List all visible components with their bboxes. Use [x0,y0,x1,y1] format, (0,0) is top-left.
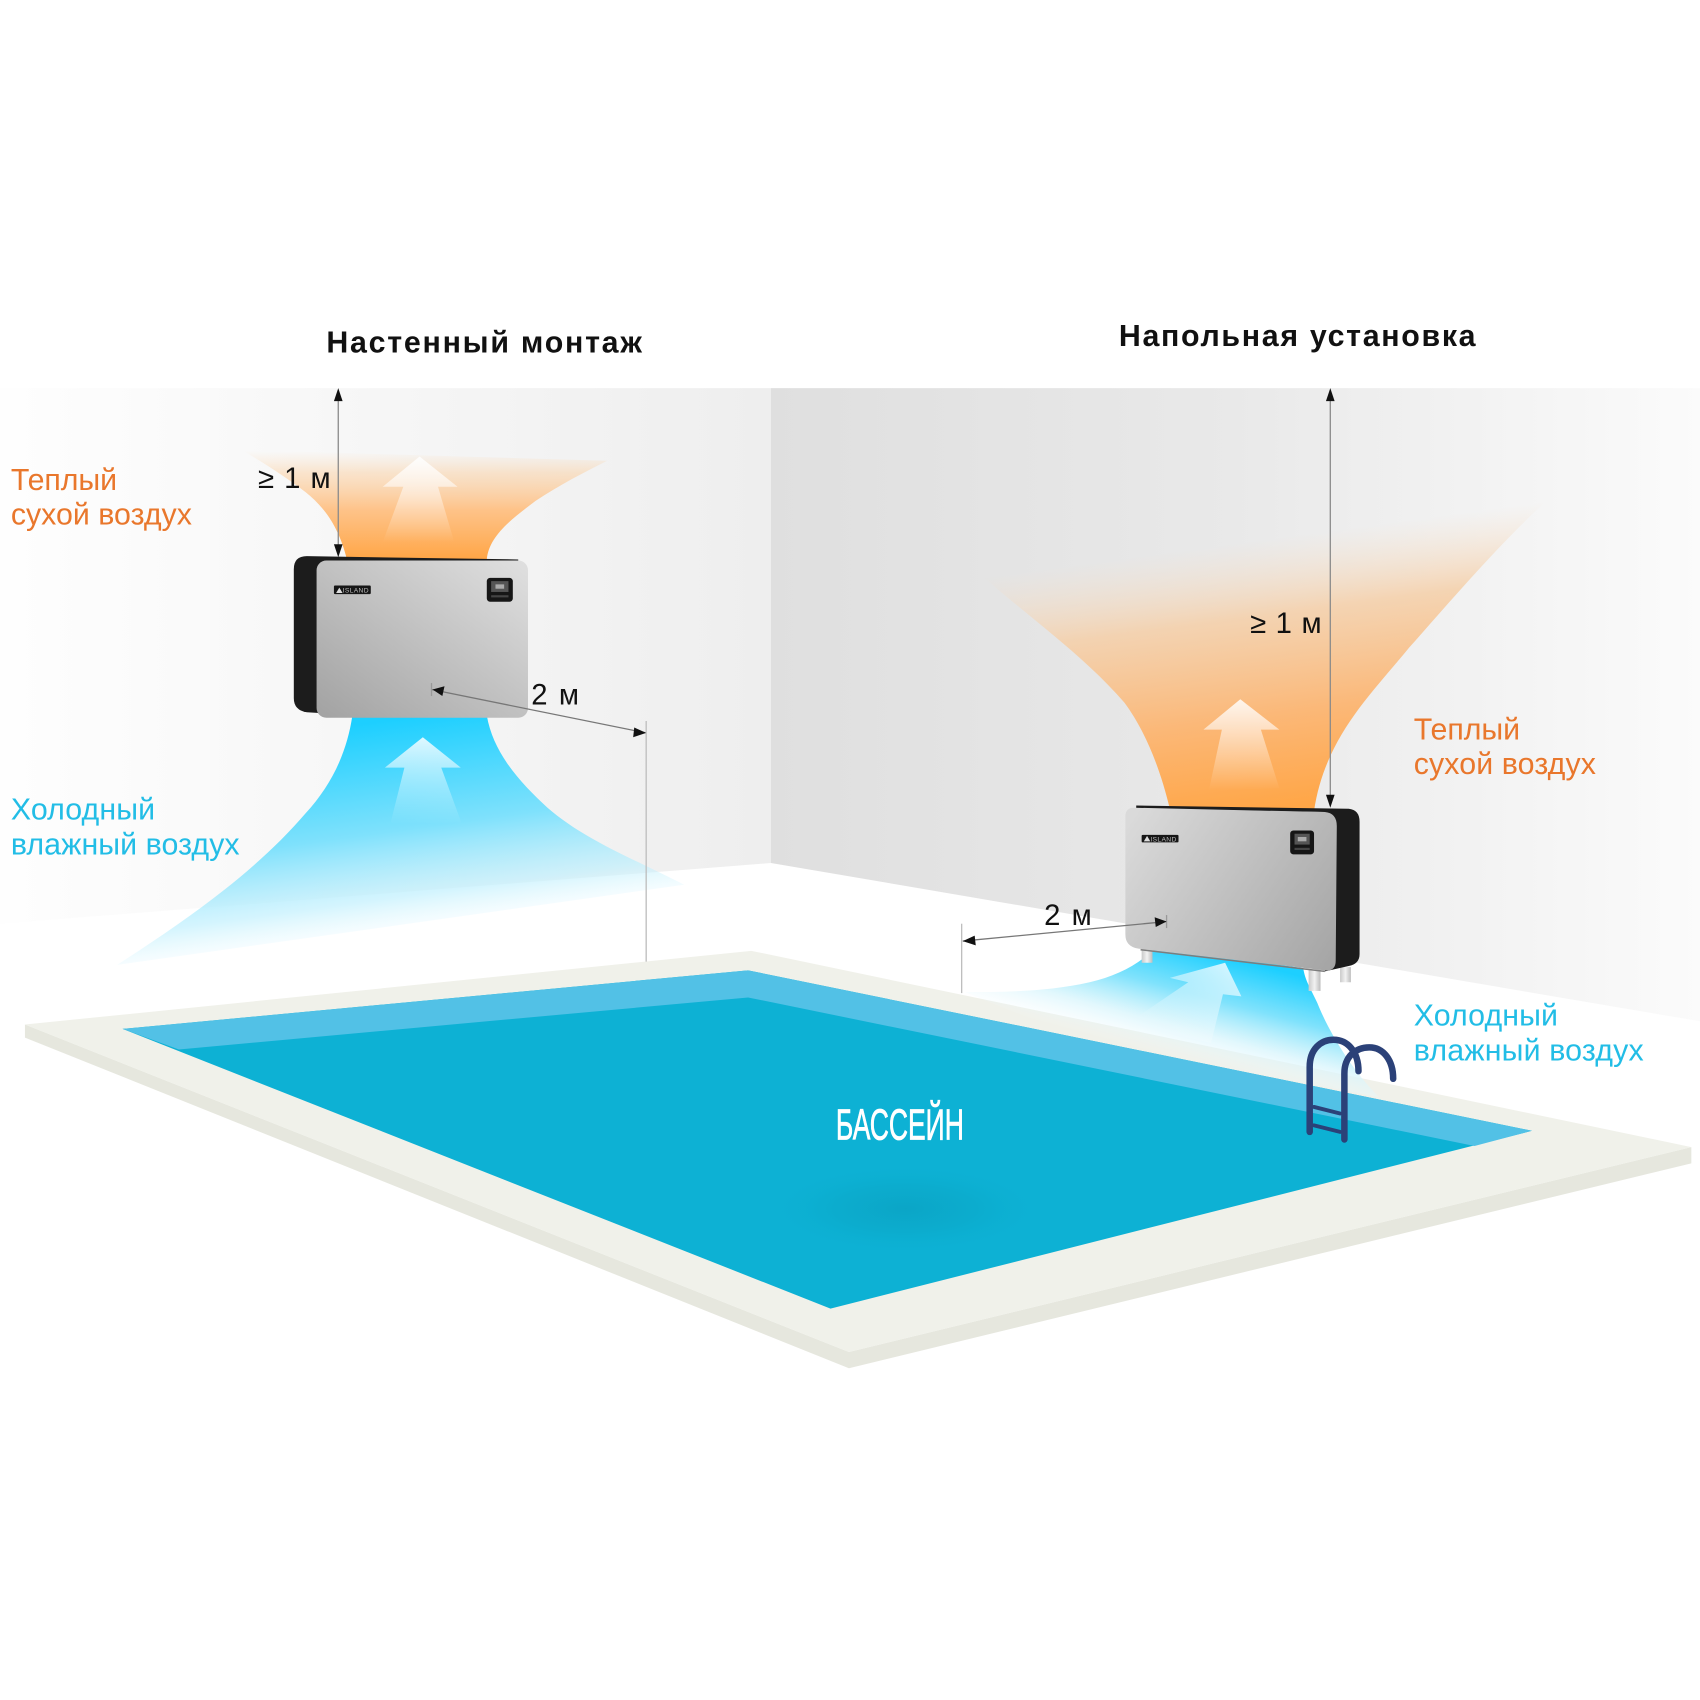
pool coping top [25,951,1691,1352]
right warm air label: Теплый [1414,713,1520,746]
left warm air arrow [383,456,458,542]
heading: wall mounting: Настенный монтаж [326,326,642,359]
unit body [294,556,518,713]
left cold air label: Холодный [11,794,155,827]
unit front panel [1125,808,1337,970]
pool water [123,970,1532,1309]
unit logo [1142,835,1179,843]
unit front panel [317,561,528,718]
right warm air label [1414,713,1596,781]
left wall [0,388,771,924]
unit body [1136,806,1360,971]
unit display [487,578,513,602]
wall unit distance label: 2 м [531,680,579,712]
unit feet [1142,946,1351,991]
floor unit distance label: 2 м [1044,900,1092,932]
swimming pool [25,951,1691,1368]
floor cold air arrow [1128,963,1241,1043]
pool coping side [25,1025,1691,1368]
left warm air label: сухой воздух [11,499,192,532]
pool ladder [1310,1040,1393,1139]
right wall [771,388,1700,1021]
floor unit height dimension [1326,388,1335,808]
floor standing unit [1125,806,1360,991]
left unit cold air plume [117,716,684,965]
left warm air label: Теплый [11,464,117,497]
left cold air label: влажный воздух [11,828,240,861]
right cold air label: влажный воздух [1414,1034,1644,1067]
unit logo: ISLAND [1150,836,1176,843]
unit display [1290,830,1314,854]
heading: floor installation: Напольная установка [1119,320,1477,353]
wall unit distance dimension [432,683,646,962]
floor unit warm air plume [984,502,1545,811]
water shadow [767,1163,1044,1254]
wall mounted unit [294,556,528,718]
unit logo [334,585,371,595]
left cold air arrow [385,737,462,824]
bottom grille line [1141,950,1325,971]
left unit warm air plume [242,450,607,559]
right cold air label: Холодный [1414,1000,1558,1033]
wall unit height label: ≥ 1 м [258,463,331,495]
shallow water band [123,970,1532,1146]
floor warm air arrow [1203,699,1279,790]
floor unit height label: ≥ 1 м [1250,608,1322,640]
right warm air label: сухой воздух [1414,748,1596,781]
pool label: БАССЕЙН [836,1100,964,1149]
unit logo: ISLAND [343,588,369,595]
right cold air label [1414,1000,1644,1067]
wall unit height dimension [334,388,343,557]
left warm air label [11,464,192,532]
floor unit distance dimension [962,915,1167,993]
left cold air label [11,794,240,861]
floor unit cold air plume [965,948,1379,1097]
